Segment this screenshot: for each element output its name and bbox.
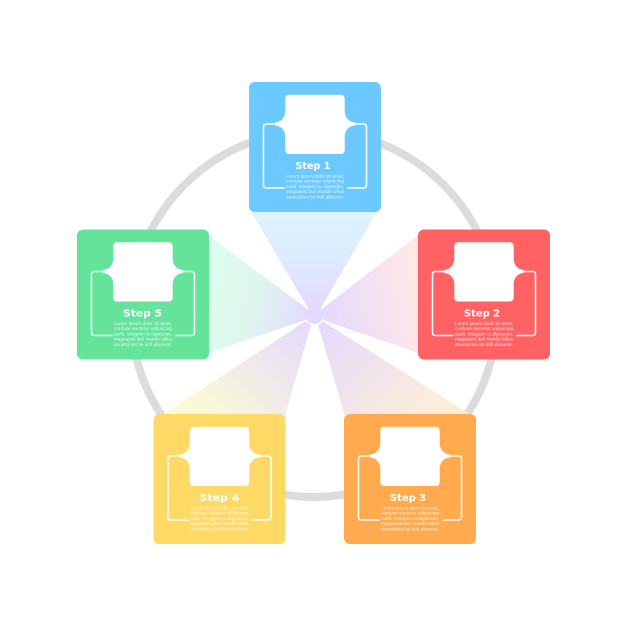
- description: audit. Integerin to dignissim,: [190, 516, 248, 521]
- description: [286, 174, 345, 199]
- description: magaasna laol mondo tellus: [455, 337, 514, 342]
- description: anuntciries be ktih placerat.: [455, 342, 513, 347]
- description: audit. Integerin to dignissim,: [381, 516, 439, 521]
- description: [455, 321, 514, 347]
- beams: [163, 210, 470, 416]
- description: anuntciries be ktih placerat.: [381, 526, 439, 531]
- beam: step 1: [250, 210, 378, 308]
- description: confuse sectetur adipiscing: [286, 179, 344, 184]
- description: magaasna laol mondo tellus: [190, 521, 249, 526]
- description: Lorem ipsum dolor sit amet,: [190, 506, 248, 510]
- description: anuntciries be ktih placerat.: [114, 342, 172, 347]
- description: magaasna laol mondo tellus: [114, 337, 173, 342]
- description: audit. Integerin to dignissim,: [286, 184, 344, 189]
- step title: Step 4: [200, 493, 240, 504]
- beam: step 2: [322, 235, 418, 353]
- description: anuntciries be ktih placerat.: [190, 526, 248, 531]
- description: confuse sectetur adipiscing: [114, 326, 172, 331]
- description: magaasna laol mondo tellus: [286, 189, 345, 194]
- description: audit. Integerin to dignissim,: [114, 331, 172, 336]
- description: [114, 321, 173, 347]
- step title: Step 1: [296, 161, 331, 172]
- description: Lorem ipsum dolor sit amet,: [455, 321, 513, 326]
- description: confuse sectetur adipiscing: [455, 326, 513, 331]
- description: anuntciries be ktih placerat.: [286, 194, 344, 199]
- description: [190, 506, 249, 531]
- description: Lorem ipsum dolor sit amet,: [286, 174, 344, 178]
- beam: step 4: [163, 321, 311, 416]
- description: audit. Integerin to dignissim,: [455, 331, 513, 336]
- card: step 4: [154, 414, 286, 544]
- description: Lorem ipsum dolor sit amet,: [381, 506, 439, 510]
- center hub: [306, 306, 324, 324]
- step title: Step 5: [123, 308, 162, 320]
- card: step 5: [77, 230, 209, 360]
- description: confuse sectetur adipiscing: [190, 511, 249, 516]
- card: step 2: [418, 230, 550, 360]
- description: Lorem ipsum dolor sit amet,: [114, 321, 172, 326]
- beam: step 3: [318, 322, 470, 416]
- description: confuse sectetur adipiscing: [381, 511, 439, 516]
- beam: step 5: [208, 235, 308, 353]
- card: step 1: [249, 82, 381, 212]
- ring: [131, 131, 497, 497]
- card: step 3: [344, 414, 476, 544]
- description: [381, 506, 440, 531]
- step title: Step 2: [464, 308, 500, 320]
- description: magaasna laol mondo tellus: [381, 521, 440, 526]
- step title: Step 3: [390, 493, 426, 504]
